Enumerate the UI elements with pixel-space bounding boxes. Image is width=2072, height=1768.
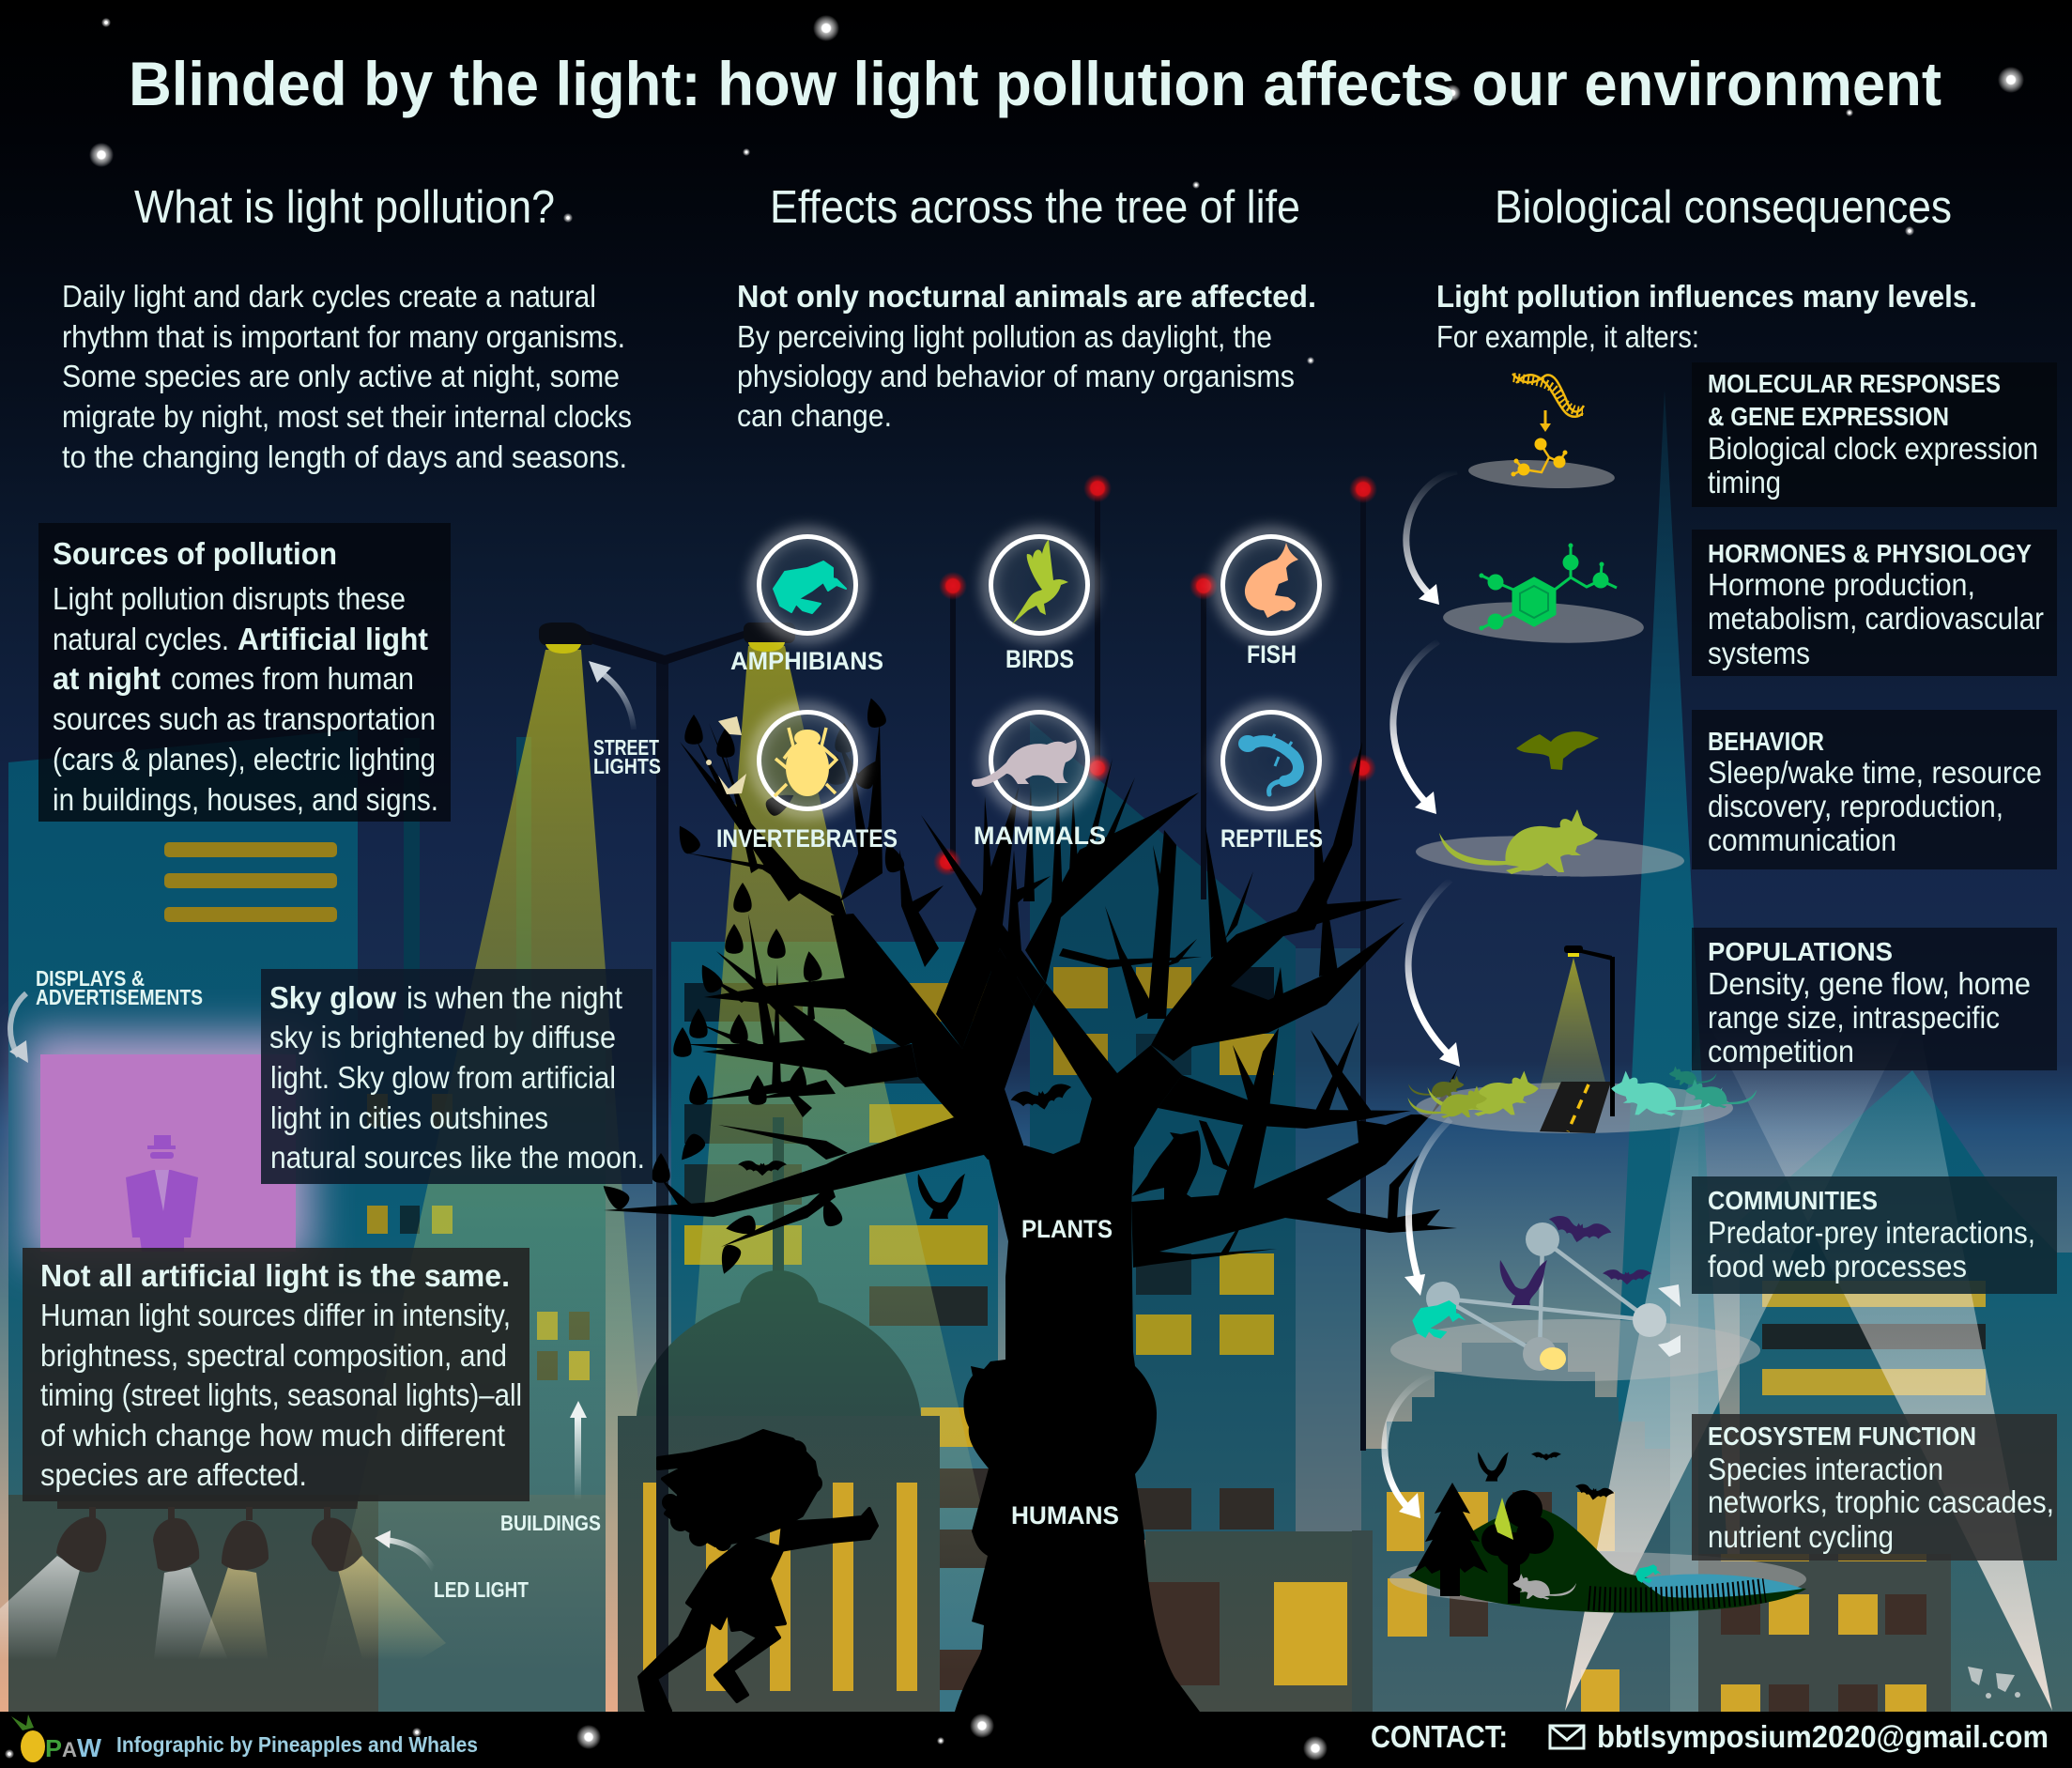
panel: not all artificial light is the same: brightness, spectral composition, and: [40, 1338, 507, 1373]
hormone molecule icon: [1480, 543, 1617, 631]
source labels: DISPLAYS &: [36, 966, 145, 991]
panel: hormones and physiology: Hormone production,: [1708, 567, 1975, 602]
DNA and small molecule icon: [1512, 374, 1584, 477]
panel: sky glow: Sky glow: [269, 980, 396, 1015]
panel: sources of pollution: Light pollution disrupts these: [53, 581, 406, 616]
panel: hormones and physiology: [1692, 530, 2057, 676]
source labels: [36, 735, 661, 1602]
panel: ecosystem function: nutrient cycling: [1708, 1519, 1894, 1554]
small arrows for source labels: [9, 661, 634, 1570]
triangular tower: [1030, 721, 1363, 1549]
column headings: [134, 182, 1952, 233]
amphibians: [730, 537, 883, 675]
intro paragraph: what is light pollution: to the changing length of days and seasons.: [62, 439, 627, 474]
fish: [1222, 537, 1320, 669]
bats and owl in the tree: [738, 1082, 1201, 1219]
arrow: buildings: [570, 1401, 587, 1500]
ecosystem: hill, pond, trees: [1408, 1452, 1806, 1613]
dark building with LED track lights: [0, 1495, 606, 1712]
buildings: [8, 721, 2072, 1712]
panel: sources of pollution: Sources of pollution: [53, 536, 337, 571]
panel: ecosystem function: [1692, 1414, 2057, 1560]
contact: [1371, 1719, 2049, 1754]
source labels: BUILDINGS: [500, 1511, 601, 1535]
right tower with slanted roof: [1740, 1070, 2072, 1712]
reptiles: REPTILES: [1220, 824, 1323, 853]
intro paragraph: tree of life: Not only nocturnal animals are affected.: [737, 279, 1316, 314]
panel: behavior: communication: [1708, 823, 1896, 857]
logo: pineapple and PAW: [11, 1714, 102, 1762]
panel: sources of pollution: sources such as transportation: [53, 701, 436, 736]
source labels: LED LIGHT: [434, 1577, 529, 1602]
panel: behavior: [1692, 710, 2057, 869]
panel: sources of pollution: (cars & planes), electric lighting: [53, 742, 436, 776]
amphibians: AMPHIBIANS: [730, 647, 883, 675]
column headings: Effects across the tree of life: [770, 182, 1300, 233]
level arrows: [1385, 471, 1457, 1512]
display sign: pink screen with man: [26, 1033, 312, 1263]
panel: sources of pollution: Artificial light: [238, 622, 428, 656]
street lamp beams: [312, 646, 1028, 1712]
low building bottom right: [1698, 1554, 1951, 1712]
panel: not all artificial light is the same: timing (street lights, seasonal lights)–all: [40, 1377, 522, 1412]
intro paragraph: tree of life: By perceiving light pollution as daylight, the: [737, 319, 1272, 354]
panel: sky glow: natural sources like the moon.: [270, 1140, 645, 1175]
panel: sky glow: sky is brightened by diffuse: [269, 1020, 616, 1054]
panel: sources of pollution: in buildings, houses, and signs.: [53, 782, 438, 817]
panel: sky glow: light. Sky glow from artificial: [270, 1060, 616, 1095]
searchlight beams: [1565, 1023, 2052, 1711]
panel: communities: COMMUNITIES: [1708, 1186, 1878, 1215]
footer: [0, 1712, 2072, 1768]
tower windows right of trunk: [1053, 967, 1274, 1530]
panel: communities: food web processes: [1708, 1249, 1967, 1284]
lamp head right: [744, 623, 795, 652]
panel: not all artificial light is the same: Human light sources differ in intensity,: [40, 1298, 511, 1332]
dome building: [618, 1117, 940, 1712]
moths near street lamp: [706, 716, 746, 794]
tree of life silhouette with human figure: [597, 696, 1458, 1712]
panel: sources of pollution: [38, 523, 451, 822]
panel: communities: Predator-prey interactions,: [1708, 1215, 2035, 1250]
tree labels: PLANTS: [1021, 1215, 1113, 1243]
column headings: Biological consequences: [1495, 182, 1952, 233]
panel: populations: [1692, 928, 2057, 1070]
lamp head left: [539, 623, 593, 653]
arrow: displays: [9, 993, 28, 1063]
panel: molecular responses: & GENE EXPRESSION: [1708, 402, 1949, 431]
leaves: [597, 696, 906, 1277]
panel: populations: range size, intraspecific: [1708, 1000, 2000, 1035]
panel: populations: competition: [1708, 1034, 1854, 1068]
intro paragraph: what is light pollution: Daily light and dark cycles create a natural: [62, 279, 596, 314]
intro paragraph: what is light pollution: Some species are only active at night, some: [62, 359, 620, 393]
platform ellipses: [1389, 456, 1806, 1607]
background spire: [1602, 390, 1736, 1712]
source labels: LIGHTS: [593, 754, 661, 778]
intro paragraph: what is light pollution: rhythm that is important for many organisms.: [62, 319, 625, 354]
fish: FISH: [1247, 640, 1297, 669]
communities: food web: [1412, 1213, 1681, 1371]
birds: [991, 537, 1087, 673]
mid-left building with windows: [358, 1033, 606, 1712]
biological levels pathway: [1385, 374, 2020, 1699]
title: Blinded by the light: how light pollution affects our environment: [129, 49, 1942, 118]
panel: populations: Density, gene flow, home: [1708, 966, 2031, 1001]
logo: pineapple and PAW: W: [77, 1733, 102, 1762]
tree trunk and adult human: [955, 1073, 1200, 1712]
footer stars: [5, 1714, 1328, 1760]
small moths bottom right: [1968, 1667, 2020, 1699]
mammals: MAMMALS: [974, 822, 1106, 850]
panel: sky glow: [261, 969, 652, 1184]
source labels: ADVERTISEMENTS: [36, 985, 203, 1009]
intro paragraph: tree of life: physiology and behavior of many organisms: [737, 359, 1295, 393]
panel: sources of pollution: natural cycles.: [53, 622, 229, 656]
central tower: [671, 942, 1015, 1712]
panel: not all artificial light is the same: [23, 1248, 530, 1501]
intro paragraph: what is light pollution: [62, 279, 632, 474]
intro paragraph: biological consequences: For example, it alters:: [1436, 319, 1699, 354]
tree branches: [604, 721, 1458, 1268]
left office building: [8, 730, 531, 1502]
taxa icons: [716, 534, 1323, 853]
low building centre right: [1145, 1531, 1361, 1712]
child silhouette: [639, 1431, 877, 1711]
source labels: STREET: [593, 735, 659, 760]
column headings: What is light pollution?: [134, 182, 555, 233]
intro paragraph: tree of life: [737, 279, 1316, 433]
panel: not all artificial light is the same: species are affected.: [40, 1457, 307, 1492]
contact: CONTACT:: [1371, 1719, 1508, 1754]
panel: hormones and physiology: systems: [1708, 636, 1810, 670]
populations: lamp, road and mice: [1408, 945, 1757, 1133]
panel: hormones and physiology: HORMONES & PHYSIOLOGY: [1708, 539, 2032, 568]
arrow heads: [1399, 584, 1460, 1518]
intro paragraph: biological consequences: [1436, 279, 1977, 354]
intro paragraph: what is light pollution: migrate by night, most set their internal clocks: [62, 399, 632, 434]
stars: [89, 15, 2024, 364]
panel: ecosystem function: Species interaction: [1708, 1452, 1943, 1486]
invertebrates: [716, 712, 898, 853]
panel: molecular responses: MOLECULAR RESPONSES: [1708, 369, 2001, 398]
panel: hormones and physiology: metabolism, cardiovascular: [1708, 601, 2044, 636]
icon glow rings: [757, 534, 1322, 811]
intro paragraph: biological consequences: Light pollution influences many levels.: [1436, 279, 1977, 314]
panel: behavior: discovery, reproduction,: [1708, 789, 2003, 823]
mammals: [972, 712, 1106, 850]
contact: bbtlsymposium2020@gmail.com: [1597, 1719, 2049, 1754]
panel: not all artificial light is the same: of which change how much different: [40, 1418, 505, 1453]
panel: ecosystem function: ECOSYSTEM FUNCTION: [1708, 1422, 1976, 1451]
panel: sources of pollution: at night: [53, 661, 161, 696]
reptiles: [1220, 712, 1323, 853]
panel: not all artificial light is the same: Not all artificial light is the same.: [40, 1258, 510, 1293]
panel: sources of pollution: comes from human: [171, 661, 414, 696]
arrow: LED: [375, 1530, 434, 1570]
logo: pineapple and PAW: A: [62, 1738, 77, 1761]
panel: populations: POPULATIONS: [1708, 937, 1893, 966]
logo: pineapple and PAW: P: [45, 1734, 62, 1762]
panel: behavior: BEHAVIOR: [1708, 727, 1824, 756]
panel: sky glow: light in cities outshines: [270, 1100, 548, 1135]
credit: Infographic by Pineapples and Whales: [116, 1732, 478, 1757]
panel: molecular responses: [1692, 362, 2057, 507]
street light pole and lamps: [539, 623, 795, 1712]
panel: communities: [1692, 1176, 2057, 1294]
behaviour: bird and mouse: [1439, 731, 1599, 874]
icon: envelope: [1550, 1726, 1584, 1748]
silhouette of man in suit: [126, 1135, 198, 1252]
stepped building: [1352, 1127, 1698, 1712]
panel: behavior: Sleep/wake time, resource: [1708, 755, 2042, 790]
arrow: street lights: [589, 661, 634, 730]
birds: BIRDS: [1005, 645, 1074, 673]
panel: molecular responses: timing: [1708, 465, 1781, 500]
tree labels: [1011, 1215, 1119, 1530]
antenna poles with red lights: [933, 474, 1377, 1451]
tree labels: HUMANS: [1011, 1501, 1119, 1530]
invertebrates: INVERTEBRATES: [716, 824, 898, 853]
panel: molecular responses: Biological clock expression: [1708, 431, 2038, 466]
intro paragraph: tree of life: can change.: [737, 398, 892, 433]
panel: sky glow: is when the night: [407, 980, 622, 1015]
